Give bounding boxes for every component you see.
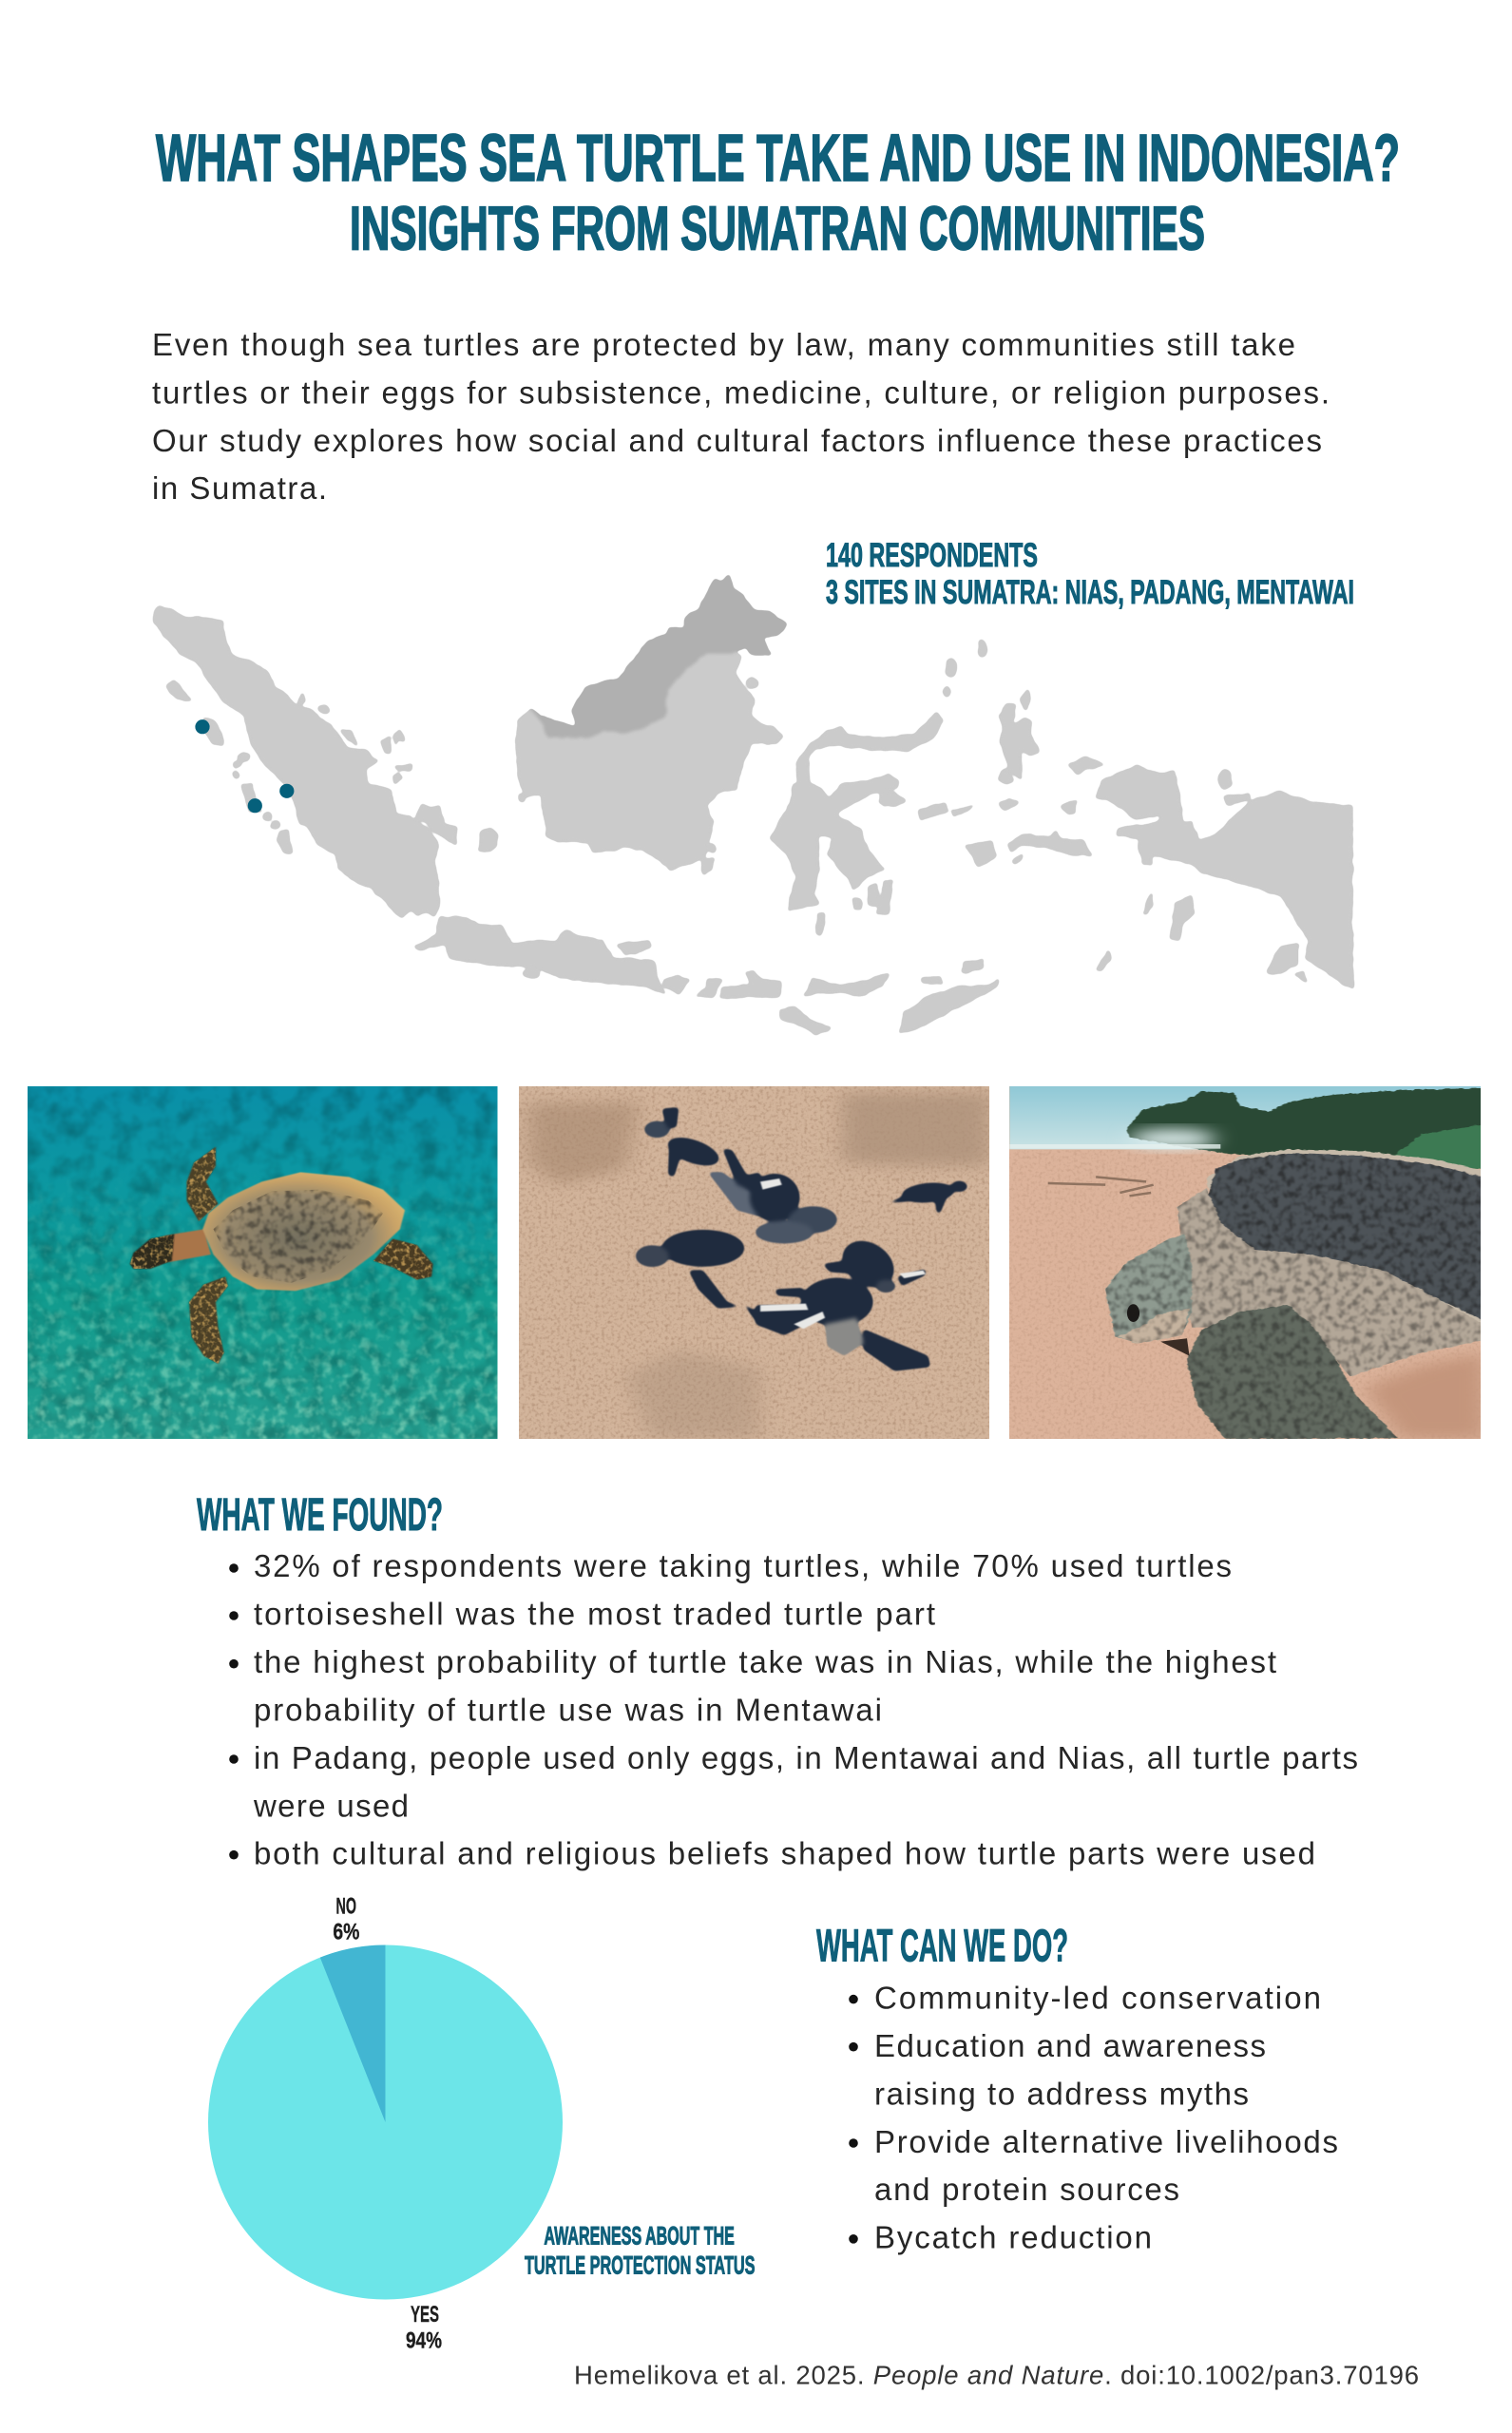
actions bullet list: Community-led conservation bbox=[874, 1980, 1321, 2015]
findings bullet list: both cultural and religious beliefs shaped how turtle parts were used bbox=[254, 1836, 1315, 1871]
label: yes bbox=[406, 2302, 442, 2354]
actions bullet list bbox=[849, 1980, 1338, 2255]
heading: what we found: WHAT WE FOUND? bbox=[197, 1490, 443, 1541]
heading: what can we do: WHAT CAN WE DO? bbox=[816, 1921, 1068, 1971]
actions bullet list: Provide alternative livelihoods bbox=[874, 2124, 1338, 2159]
citation: Hemelikova et al. 2025. People and Nature. doi:10.1002/pan3.70196 bbox=[574, 2361, 1419, 2389]
intro text: in Sumatra. bbox=[152, 470, 327, 506]
pie chart: awareness of protection status bbox=[208, 1893, 755, 2354]
label: yes: YES bbox=[411, 2302, 439, 2328]
map of Indonesia bbox=[155, 576, 1353, 1034]
actions bullet list: raising to address myths bbox=[874, 2076, 1249, 2112]
photo: nesting green turtle on beach bbox=[1009, 1086, 1484, 1439]
photo: green turtle hatchlings on sand bbox=[519, 1086, 990, 1439]
wedge: no 6% bbox=[320, 1944, 386, 2122]
intro text: Our study explores how social and cultural factors influence these practices bbox=[152, 423, 1322, 458]
study sites callout: 140 RESPONDENTS bbox=[826, 537, 1038, 574]
findings bullet list bbox=[229, 1548, 1358, 1871]
findings bullet list: tortoiseshell was the most traded turtle part bbox=[254, 1597, 935, 1632]
label: no: 6% bbox=[333, 1920, 359, 1945]
chart caption bbox=[525, 2222, 755, 2279]
findings bullet list: 32% of respondents were taking turtles, while 70% used turtles bbox=[254, 1548, 1232, 1583]
findings bullet list: in Padang, people used only eggs, in Mentawai and Nias, all turtle parts bbox=[254, 1740, 1358, 1775]
section: what can we do bbox=[816, 1921, 1338, 2255]
label: yes: 94% bbox=[406, 2328, 442, 2354]
actions bullet list: Education and awareness bbox=[874, 2028, 1266, 2063]
intro text: Even though sea turtles are protected by law, many communities still take bbox=[152, 327, 1295, 362]
findings bullet list: probability of turtle use was in Mentawai bbox=[254, 1693, 882, 1728]
actions bullet list: Bycatch reduction bbox=[874, 2220, 1152, 2255]
actions bullet list: and protein sources bbox=[874, 2172, 1179, 2207]
label: no: NO bbox=[336, 1893, 356, 1919]
intro text bbox=[152, 327, 1330, 506]
study sites callout bbox=[826, 537, 1354, 611]
chart caption: TURTLE PROTECTION STATUS bbox=[525, 2251, 755, 2279]
section: what we found bbox=[197, 1490, 1358, 1871]
intro text: turtles or their eggs for subsistence, medicine, culture, or religion purposes. bbox=[152, 374, 1330, 410]
site markers: Nias, Padang, Mentawai bbox=[195, 719, 294, 813]
chart caption: AWARENESS ABOUT THE bbox=[544, 2222, 735, 2251]
title bbox=[156, 121, 1400, 263]
label: no bbox=[333, 1893, 359, 1945]
findings bullet list: were used bbox=[253, 1789, 409, 1824]
photo: hawksbill turtle underwater bbox=[28, 1086, 498, 1439]
findings bullet list: the highest probability of turtle take was in Nias, while the highest bbox=[254, 1644, 1276, 1679]
